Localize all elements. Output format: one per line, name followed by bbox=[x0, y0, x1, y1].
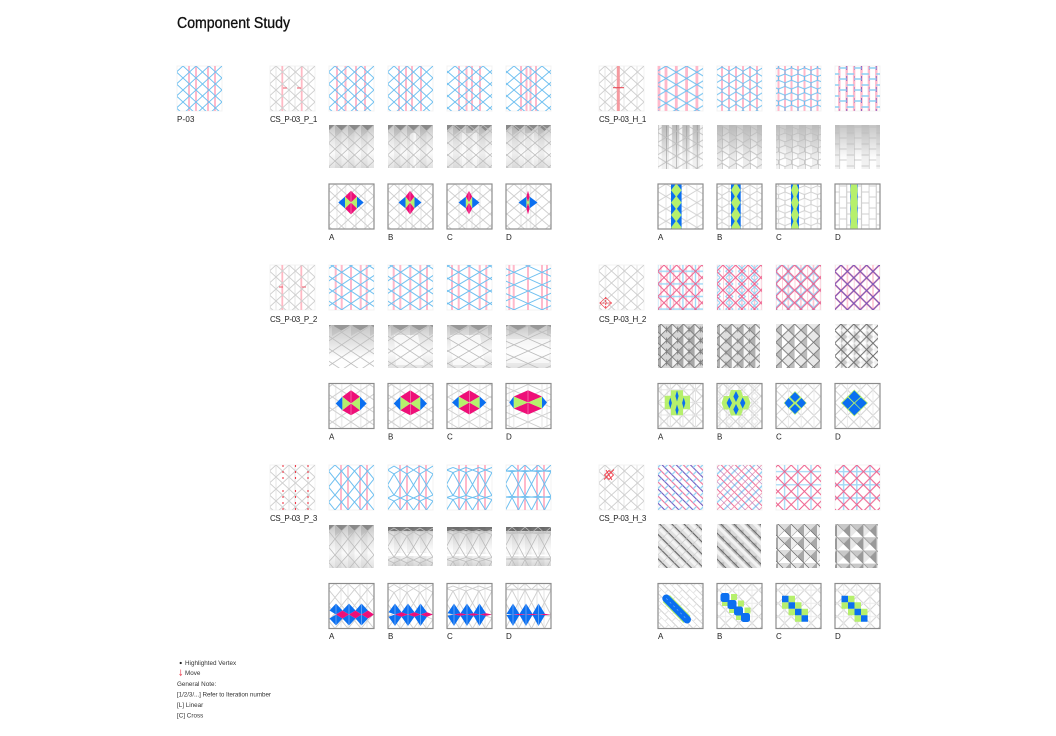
letters A B C D: C bbox=[447, 632, 453, 641]
fold A bbox=[658, 524, 702, 568]
letters A B C D: A bbox=[329, 632, 335, 641]
map D bbox=[506, 184, 551, 229]
fold B bbox=[388, 527, 433, 566]
crease C bbox=[447, 465, 492, 510]
crease B bbox=[717, 465, 762, 510]
crease A bbox=[329, 265, 374, 310]
note: cross: [C] Cross bbox=[177, 712, 203, 720]
label: CS_P-03_P_2: CS_P-03_P_2 bbox=[270, 315, 318, 324]
thumbnail: CS_P-03_P_2 bbox=[270, 265, 315, 310]
thumbnail: CS_P-03_H_1 bbox=[599, 66, 644, 111]
crease A bbox=[658, 265, 703, 310]
map D bbox=[835, 384, 880, 428]
title: Component Study bbox=[177, 15, 290, 32]
label: CS_P-03_H_1: CS_P-03_H_1 bbox=[599, 115, 647, 124]
crease D bbox=[835, 265, 880, 310]
icon: highlighted vertex dot bbox=[180, 662, 182, 664]
legend and general notes bbox=[177, 660, 271, 720]
map C bbox=[776, 384, 821, 428]
crease B bbox=[388, 66, 433, 111]
map B bbox=[388, 384, 433, 428]
letters A B C D: A bbox=[658, 432, 664, 442]
letters A B C D: C bbox=[776, 233, 782, 242]
crease D bbox=[835, 66, 880, 111]
letters A B C D: A bbox=[658, 632, 664, 641]
letters A B C D bbox=[329, 432, 512, 442]
crease A bbox=[658, 465, 703, 510]
fold D bbox=[835, 524, 878, 568]
thumbnail: CS_P-03_P_3 bbox=[270, 465, 315, 510]
map D bbox=[835, 584, 880, 628]
thumbnail: P-03 crease pattern bbox=[177, 66, 222, 111]
map C bbox=[447, 384, 492, 428]
letters A B C D: B bbox=[388, 632, 394, 641]
fold C bbox=[447, 125, 492, 168]
note: iteration number: [1/2/3/...] Refer to Iteration number bbox=[177, 692, 271, 698]
panel: CS_P-03_P_1 bbox=[270, 66, 551, 242]
fold D bbox=[835, 125, 880, 169]
map C bbox=[447, 184, 492, 229]
crease B bbox=[388, 265, 433, 310]
crease B bbox=[388, 465, 433, 510]
fold C bbox=[776, 524, 820, 568]
crease A bbox=[329, 465, 374, 510]
map A bbox=[329, 184, 374, 229]
legend: move: Move bbox=[185, 670, 201, 677]
map A bbox=[658, 584, 703, 628]
map B bbox=[717, 584, 762, 628]
thumbnail: CS_P-03_H_3 bbox=[599, 465, 644, 510]
letters A B C D: D bbox=[835, 632, 841, 641]
letters A B C D: C bbox=[447, 233, 453, 242]
fold A bbox=[329, 125, 374, 168]
crease D bbox=[835, 465, 880, 510]
letters A B C D: A bbox=[329, 233, 335, 242]
fold D bbox=[506, 325, 551, 368]
map B bbox=[388, 584, 433, 628]
fold A bbox=[329, 325, 374, 368]
letters A B C D: D bbox=[506, 632, 512, 641]
letters A B C D bbox=[658, 233, 841, 242]
fold B bbox=[717, 524, 761, 568]
panel: base pattern P-03 bbox=[177, 66, 222, 124]
label: CS_P-03_P_3: CS_P-03_P_3 bbox=[270, 514, 318, 523]
map C bbox=[776, 184, 821, 229]
legend: highlighted vertex: Highlighted Vertex bbox=[185, 660, 237, 667]
fold D bbox=[506, 527, 551, 566]
panel: CS_P-03_P_2 bbox=[270, 265, 551, 442]
map C bbox=[776, 584, 821, 628]
crease D bbox=[506, 265, 551, 310]
panel: CS_P-03_H_3 bbox=[599, 465, 880, 641]
letters A B C D: C bbox=[776, 432, 782, 442]
note: linear: [L] Linear bbox=[177, 702, 203, 709]
letters A B C D: D bbox=[835, 233, 841, 242]
letters A B C D: B bbox=[717, 233, 723, 242]
panel: CS_P-03_H_2 bbox=[599, 265, 880, 442]
letters A B C D bbox=[658, 432, 841, 442]
crease D bbox=[506, 66, 551, 111]
crease A bbox=[658, 66, 703, 111]
fold B bbox=[388, 125, 433, 168]
fold D bbox=[506, 125, 551, 168]
letters A B C D: B bbox=[388, 233, 394, 242]
letters A B C D: D bbox=[835, 432, 841, 442]
letters A B C D: D bbox=[506, 233, 512, 242]
fold C bbox=[776, 324, 820, 368]
letters A B C D: C bbox=[447, 432, 453, 442]
label: P-03: P-03 bbox=[177, 115, 195, 124]
fold A bbox=[658, 324, 703, 368]
crease C bbox=[447, 66, 492, 111]
map D bbox=[835, 184, 880, 229]
fold B bbox=[717, 125, 762, 169]
map D bbox=[506, 384, 551, 428]
panel: CS_P-03_H_1 bbox=[599, 66, 880, 242]
map A bbox=[658, 384, 703, 428]
panel: CS_P-03_P_3 bbox=[270, 465, 551, 641]
icon: move arrow bbox=[180, 670, 182, 676]
map A bbox=[329, 584, 374, 628]
letters A B C D: A bbox=[329, 432, 335, 442]
thumbnail: CS_P-03_P_1 bbox=[270, 66, 315, 111]
crease C bbox=[776, 465, 821, 510]
letters A B C D: A bbox=[658, 233, 664, 242]
fold C bbox=[447, 325, 492, 368]
crease C bbox=[447, 265, 492, 310]
map A bbox=[658, 184, 703, 229]
letters A B C D: B bbox=[717, 432, 723, 442]
fold A bbox=[658, 125, 703, 169]
map D bbox=[506, 584, 551, 628]
map B bbox=[717, 384, 762, 428]
fold A bbox=[329, 525, 374, 568]
fold D bbox=[835, 324, 878, 368]
label: CS_P-03_P_1: CS_P-03_P_1 bbox=[270, 115, 318, 124]
crease A bbox=[329, 66, 374, 111]
map A bbox=[329, 384, 374, 428]
letters A B C D: C bbox=[776, 632, 782, 641]
crease B bbox=[717, 66, 762, 111]
fold B bbox=[717, 324, 760, 368]
letters A B C D bbox=[329, 233, 512, 242]
map B bbox=[388, 184, 433, 229]
thumbnail: CS_P-03_H_2 bbox=[599, 265, 644, 310]
letters A B C D bbox=[329, 632, 512, 641]
map C bbox=[447, 584, 492, 628]
note heading: General Note: bbox=[177, 681, 216, 688]
letters A B C D bbox=[658, 632, 841, 641]
crease B bbox=[717, 265, 762, 310]
crease C bbox=[776, 265, 821, 310]
map B bbox=[717, 184, 762, 229]
label: CS_P-03_H_2: CS_P-03_H_2 bbox=[599, 315, 647, 324]
fold B bbox=[388, 325, 433, 368]
letters A B C D: B bbox=[388, 432, 394, 442]
crease C bbox=[776, 66, 821, 111]
crease D bbox=[506, 465, 551, 510]
fold C bbox=[447, 527, 492, 566]
label: CS_P-03_H_3: CS_P-03_H_3 bbox=[599, 514, 647, 523]
letters A B C D: B bbox=[717, 632, 723, 641]
letters A B C D: D bbox=[506, 432, 512, 442]
fold C bbox=[776, 125, 821, 169]
